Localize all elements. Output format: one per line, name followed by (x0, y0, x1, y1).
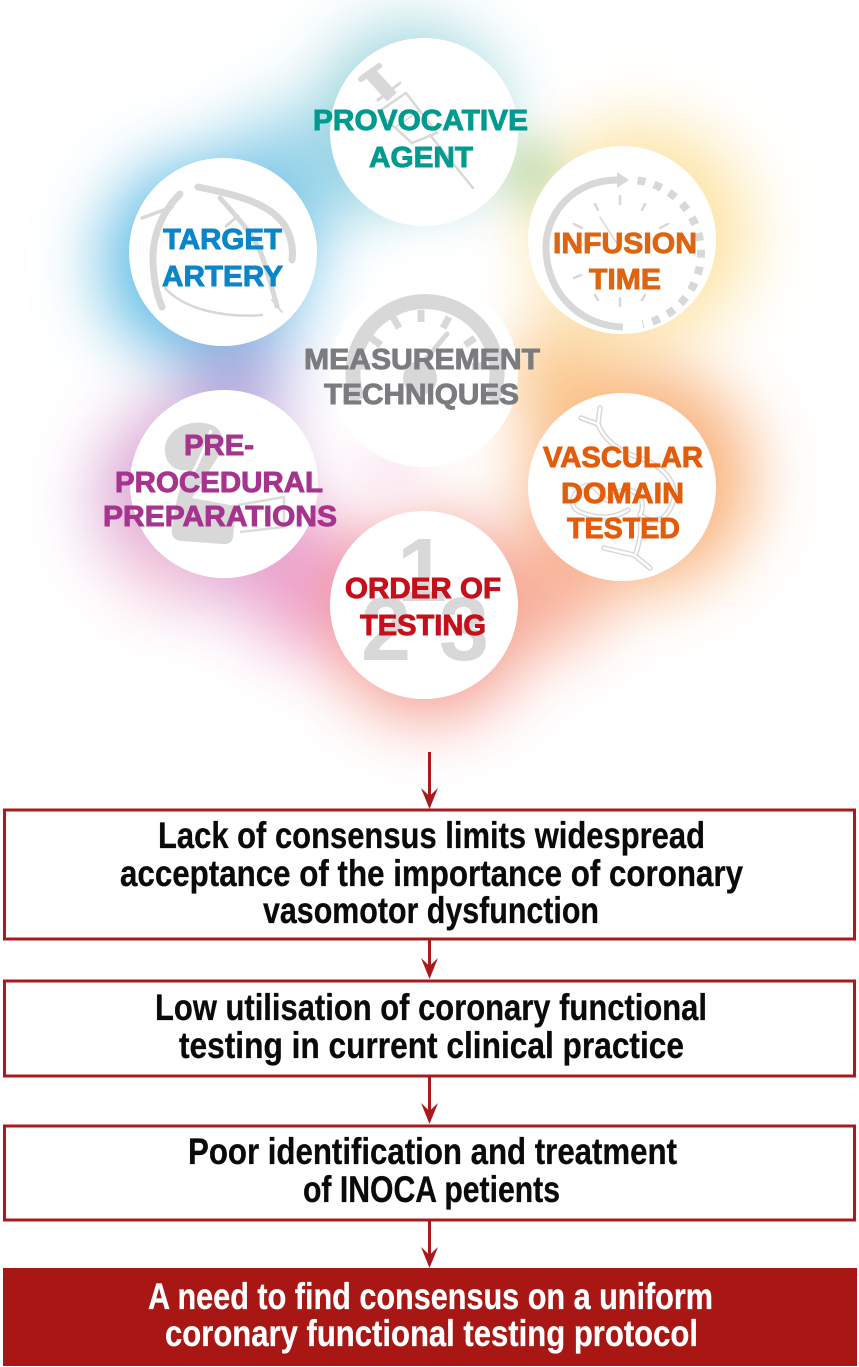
box: low utilisation: Low utilisation of coronary functional (155, 987, 707, 1028)
box: lack of consensus (4, 810, 854, 939)
arrow: low utilisation to poor identification (421, 1077, 438, 1124)
icon: order numbers: 3 (439, 580, 489, 680)
label: target artery (162, 224, 283, 293)
label: pre-procedural preparations: PROCEDURAL (115, 467, 323, 499)
label: target artery: ARTERY (162, 261, 283, 293)
coloured glow background (96, 26, 752, 718)
box: lack of consensus: Lack of consensus limits widespread (158, 815, 705, 856)
label: vascular domain tested (543, 442, 703, 545)
icon: order numbers: 1 (397, 521, 447, 621)
arrow: lack of consensus to low utilisation (421, 940, 438, 979)
box: poor identification (4, 1126, 854, 1220)
icon: infusion clock (546, 172, 703, 327)
label: provocative agent: PROVOCATIVE (313, 105, 528, 137)
box: low utilisation: testing in current clinical practice (179, 1025, 684, 1066)
label: order of testing: TESTING (360, 610, 486, 642)
icon: measurement gauge (353, 302, 497, 400)
label: infusion time: INFUSION (553, 228, 697, 260)
label: vascular domain tested: VASCULAR (543, 442, 703, 474)
icon: syringe (361, 66, 473, 188)
label: pre-procedural preparations: PRE- (184, 430, 254, 462)
box: lack of consensus: vasomotor dysfunction (263, 890, 599, 931)
label: order of testing (345, 573, 501, 642)
label: infusion time: TIME (589, 264, 661, 296)
label: measurement techniques: MEASUREMENT (304, 344, 540, 376)
box: low utilisation (4, 981, 854, 1076)
label: provocative agent (313, 105, 528, 174)
icon: order numbers: 2 (361, 580, 411, 680)
box: call to action (3, 1268, 857, 1366)
label: provocative agent: AGENT (369, 142, 473, 174)
box: lack of consensus: acceptance of the importance of coronary (120, 853, 743, 894)
label: pre-procedural preparations: PREPARATIONS (103, 501, 337, 533)
arrow: factors to lack of consensus (421, 752, 438, 809)
panel: factor circles (129, 38, 716, 699)
box: call to action: coronary functional testing protocol (165, 1313, 698, 1354)
label: vascular domain tested: DOMAIN (561, 478, 684, 510)
label: pre-procedural preparations (103, 430, 337, 533)
arrow: poor identification to need (421, 1221, 438, 1268)
label: target artery: TARGET (163, 224, 282, 256)
box: poor identification: Poor identification and treatment (188, 1131, 677, 1172)
icon: order numbers (361, 521, 489, 680)
box: poor identification: of INOCA petients (303, 1169, 560, 1210)
label: infusion time (553, 228, 697, 296)
label: measurement techniques (304, 344, 540, 411)
label: order of testing: ORDER OF (345, 573, 501, 605)
label: measurement techniques: TECHNIQUES (324, 379, 519, 411)
label: vascular domain tested: TESTED (567, 513, 680, 545)
icon: pre-procedural preparations (165, 423, 284, 544)
box: call to action: A need to find consensus on a uniform (148, 1276, 713, 1317)
icon: coronary arteries (142, 187, 292, 316)
icon: vascular domain (572, 408, 674, 568)
